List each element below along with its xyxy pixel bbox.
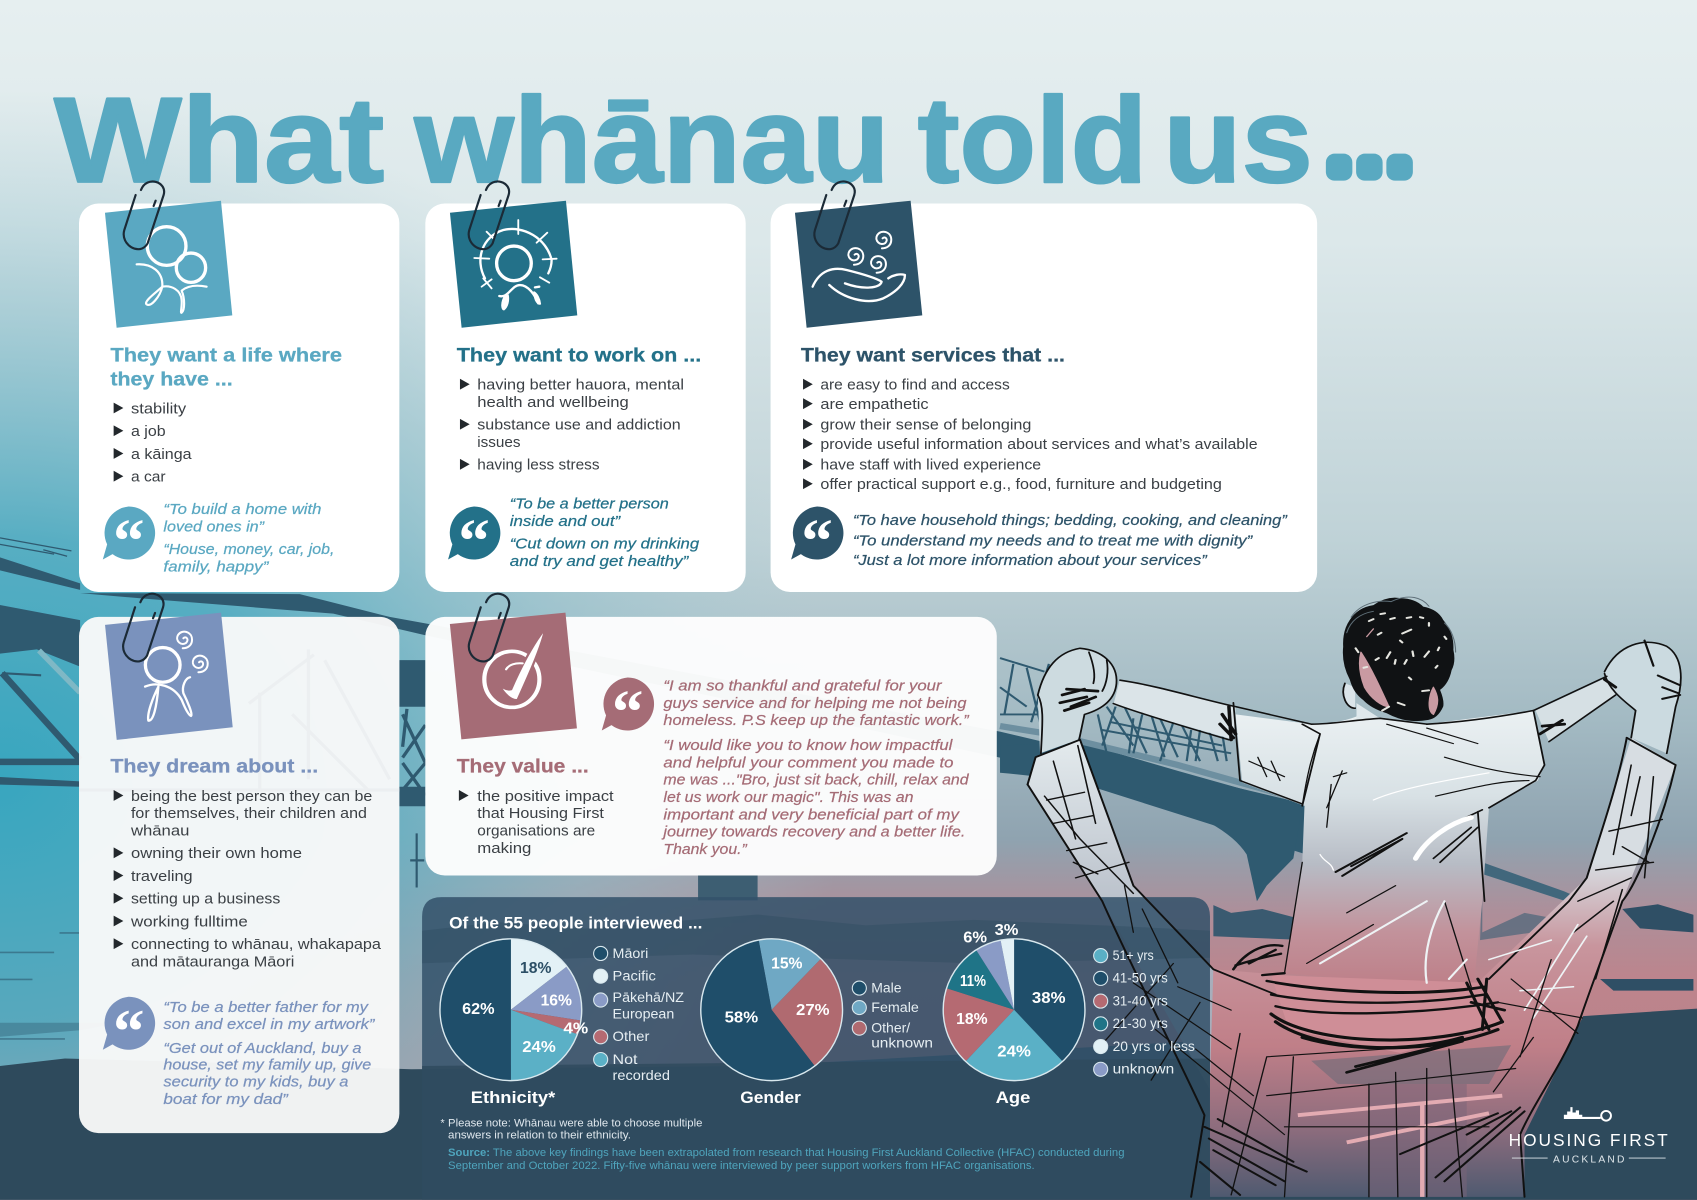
icon: quote bubble [103, 996, 155, 1066]
title: What [54, 72, 384, 208]
legend: gender: Male [871, 979, 902, 995]
pie chart: gender: Gender [740, 1089, 802, 1107]
quotes: “Get out of Auckland, buy a [163, 1041, 361, 1057]
icon: hand with spirals note with paperclip [795, 181, 922, 328]
legend: gender: unknown [871, 1035, 933, 1051]
list: grow their sense of belonging [820, 418, 1031, 434]
pie chart: gender: 15% [771, 956, 803, 973]
pie chart: age [943, 922, 1085, 1107]
heading [110, 344, 342, 390]
statistics heading: Of the 55 people interviewed ... [449, 914, 702, 933]
icon: quote bubble [448, 506, 500, 576]
quotes: “House, money, car, job, [163, 542, 334, 558]
quotes: “To have household things; bedding, cooking, and cleaning” [853, 513, 1288, 529]
pie chart: age: 18% [956, 1011, 988, 1028]
background: harbour bridge silhouette [0, 538, 1697, 1199]
statistics panel background [422, 897, 1210, 1199]
title: whānau [413, 72, 890, 208]
legend: age: unknown [1113, 1061, 1174, 1077]
icon: quote bubble: “ [113, 506, 144, 576]
list: owning their own home [131, 846, 302, 862]
pie chart: ethnicity: 62% [462, 1001, 495, 1018]
legend: ethnicity: Māori [613, 945, 648, 961]
list: setting up a business [131, 892, 280, 908]
quotes: journey towards recovery and a better life. [661, 825, 965, 841]
list: working fulltime [130, 914, 248, 930]
panel: want services that [771, 181, 1317, 592]
quotes: homeless. P.S keep up the fantastic work.” [663, 713, 970, 729]
list: a car [131, 470, 166, 486]
left arm and hand [1038, 648, 1427, 806]
title: ... [1330, 113, 1421, 186]
quotes: guys service and for helping me not being [663, 696, 966, 712]
icon: quote bubble: “ [458, 506, 490, 576]
pie chart: ethnicity: Ethnicity* [471, 1089, 556, 1107]
title [54, 72, 1421, 208]
logo: Housing First Auckland: AUCKLAND [1553, 1154, 1624, 1165]
quotes: “To understand my needs and to treat me with dignity” [853, 533, 1254, 549]
pie chart: gender [701, 939, 843, 1107]
footnote: answers in relation to their ethnicity. [448, 1130, 631, 1142]
quotes: security to my kids, buy a [163, 1075, 348, 1091]
list: the positive impact [477, 789, 614, 805]
legend: ethnicity: Other [613, 1028, 650, 1044]
icon: quote bubble [103, 506, 155, 576]
list [114, 789, 382, 970]
pie chart: ethnicity: 24% [522, 1039, 556, 1056]
quotes [163, 502, 334, 575]
icon: quote bubble: “ [113, 996, 144, 1066]
list: making [477, 841, 531, 857]
shirt folds [1284, 724, 1540, 987]
quotes: me was ..."Bro, just sit back, chill, relax and [663, 773, 970, 789]
list [114, 401, 193, 486]
list: and mātauranga Māori [131, 954, 294, 970]
list: are empathetic [820, 397, 929, 413]
footnote [440, 1118, 702, 1142]
legend: age [1094, 947, 1195, 1077]
list: organisations are [477, 823, 595, 839]
right arm and hand [1427, 641, 1681, 808]
quotes: let us work our magic". This was an [663, 790, 913, 806]
list: having less stress [477, 458, 600, 474]
list: issues [477, 435, 521, 451]
quotes: “Just a lot more information about your services” [853, 553, 1208, 569]
heading: they have ... [110, 368, 233, 390]
quotes: “Cut down on my drinking [510, 537, 699, 553]
list: substance use and addiction [477, 418, 681, 434]
quotes [510, 497, 699, 570]
quotes [853, 513, 1288, 569]
pie chart: age: 11% [960, 973, 986, 990]
right leg [1400, 738, 1676, 1197]
legend: gender: Female [871, 999, 919, 1015]
title: us [1163, 72, 1313, 208]
legend: ethnicity [594, 945, 685, 1083]
quotes: “I am so thankful and grateful for your [663, 678, 943, 694]
quotes: inside and out” [510, 514, 621, 530]
list [460, 378, 684, 474]
pie chart: age: 24% [997, 1043, 1031, 1060]
legend: age: 41-50 yrs [1113, 970, 1168, 986]
list: whānau [130, 823, 189, 839]
quotes: boat for my dad” [163, 1092, 289, 1108]
icon: paperclip [469, 594, 509, 661]
icon: quote bubble: “ [612, 677, 643, 747]
list: connecting to whānau, whakapapa [131, 937, 382, 953]
quotes: important and very beneficial part of my [663, 807, 960, 823]
legend: ethnicity: Pacific [613, 968, 656, 984]
list: a kāinga [131, 447, 193, 463]
legend: ethnicity: European [613, 1005, 674, 1021]
waistband scribble [1233, 945, 1505, 1072]
legend: gender [852, 979, 933, 1051]
panel: dream about [79, 594, 399, 1133]
icon: family note with paperclip [105, 181, 232, 328]
list: stability [131, 401, 187, 417]
list: for themselves, their children and [131, 806, 367, 822]
panel: they value [425, 594, 997, 876]
list: have staff with lived experience [820, 458, 1041, 474]
list: being the best person they can be [131, 789, 372, 805]
list [459, 789, 614, 857]
hair [1343, 597, 1456, 721]
heading: They want services that ... [801, 344, 1065, 366]
pie chart: ethnicity: 18% [520, 960, 551, 977]
illustration: figure line art [1028, 597, 1681, 1197]
list: are easy to find and access [820, 378, 1010, 394]
list: health and wellbeing [477, 395, 629, 411]
quotes: “To be a better person [510, 497, 669, 513]
pie chart: gender: 58% [725, 1010, 758, 1027]
legend: age: 31-40 yrs [1113, 992, 1168, 1008]
logo: Housing First Auckland: HOUSING FIRST [1509, 1130, 1668, 1150]
quotes: “To build a home with [163, 502, 321, 518]
legend: age: 21-30 yrs [1113, 1015, 1168, 1031]
pie chart: age: 38% [1032, 990, 1066, 1007]
source note: September and October 2022. Fifty-five whānau were interviewed by peer support workers from HFAC organisations. [448, 1160, 1035, 1172]
list [803, 378, 1258, 493]
quotes: family, happy” [163, 559, 270, 575]
quotes: and try and get healthy” [510, 554, 690, 570]
quotes: house, set my family up, give [163, 1057, 371, 1073]
quotes: Thank you.” [663, 842, 748, 858]
pie chart: ethnicity: 4% [563, 1021, 588, 1038]
title: told [918, 72, 1147, 208]
heading: They want to work on ... [457, 344, 701, 366]
quotes: loved ones in” [163, 519, 265, 535]
icon: tick in circle note [450, 613, 577, 739]
illustration: figure body fill [1028, 642, 1681, 1197]
pie chart: gender: 27% [796, 1002, 830, 1019]
logo: Housing First Auckland [1509, 1107, 1668, 1165]
legend: ethnicity: Pākehā/NZ [613, 989, 685, 1005]
panel: want to work on [425, 181, 746, 592]
legend: ethnicity: Not [613, 1051, 638, 1067]
icon: quote bubble [602, 677, 654, 747]
footnote: * [440, 1118, 445, 1130]
legend: ethnicity: recorded [613, 1067, 670, 1083]
quotes: son and excel in my artwork” [163, 1017, 376, 1033]
list: that Housing First [477, 806, 604, 822]
pie chart: age: 3% [995, 922, 1018, 939]
quotes [163, 1000, 376, 1108]
icon: quote bubble [791, 506, 843, 576]
left leg [1028, 740, 1516, 1197]
pie chart: age: 6% [963, 930, 987, 947]
pie chart: ethnicity: 16% [541, 992, 572, 1009]
list: having better hauora, mental [477, 378, 684, 394]
legend: age: 20 yrs or less [1113, 1038, 1195, 1054]
icon: dreaming person note with paperclip [105, 594, 233, 740]
panel: a life where they have [79, 181, 399, 592]
quotes: “To be a better father for my [163, 1000, 369, 1016]
list: a job [131, 424, 166, 440]
quotes [661, 678, 970, 858]
heading: They dream about ... [110, 756, 318, 778]
pie chart: age: Age [996, 1089, 1030, 1107]
heading: They value ... [457, 756, 589, 778]
pie chart: ethnicity [440, 939, 588, 1107]
legend: age: 51+ yrs [1113, 947, 1154, 963]
icon: quote bubble: “ [801, 506, 833, 576]
list: offer practical support e.g., food, furniture and budgeting [820, 477, 1222, 493]
list: traveling [131, 869, 193, 885]
source note: Source: The above key findings have been extrapolated from research that Housing First Auckland Collective (HFAC) conducted during [448, 1147, 1125, 1159]
heading: They want a life where [110, 344, 342, 366]
quotes: and helpful your comment you made to [663, 755, 953, 771]
footnote: Please note: Whānau were able to choose multiple [448, 1118, 702, 1130]
source note [448, 1147, 1125, 1172]
list: provide useful information about services and what’s available [820, 437, 1258, 453]
legend: gender: Other/ [871, 1019, 910, 1035]
icon: person with halo note with paperclip [450, 181, 577, 328]
quotes: “I would like you to know how impactful [663, 738, 953, 754]
